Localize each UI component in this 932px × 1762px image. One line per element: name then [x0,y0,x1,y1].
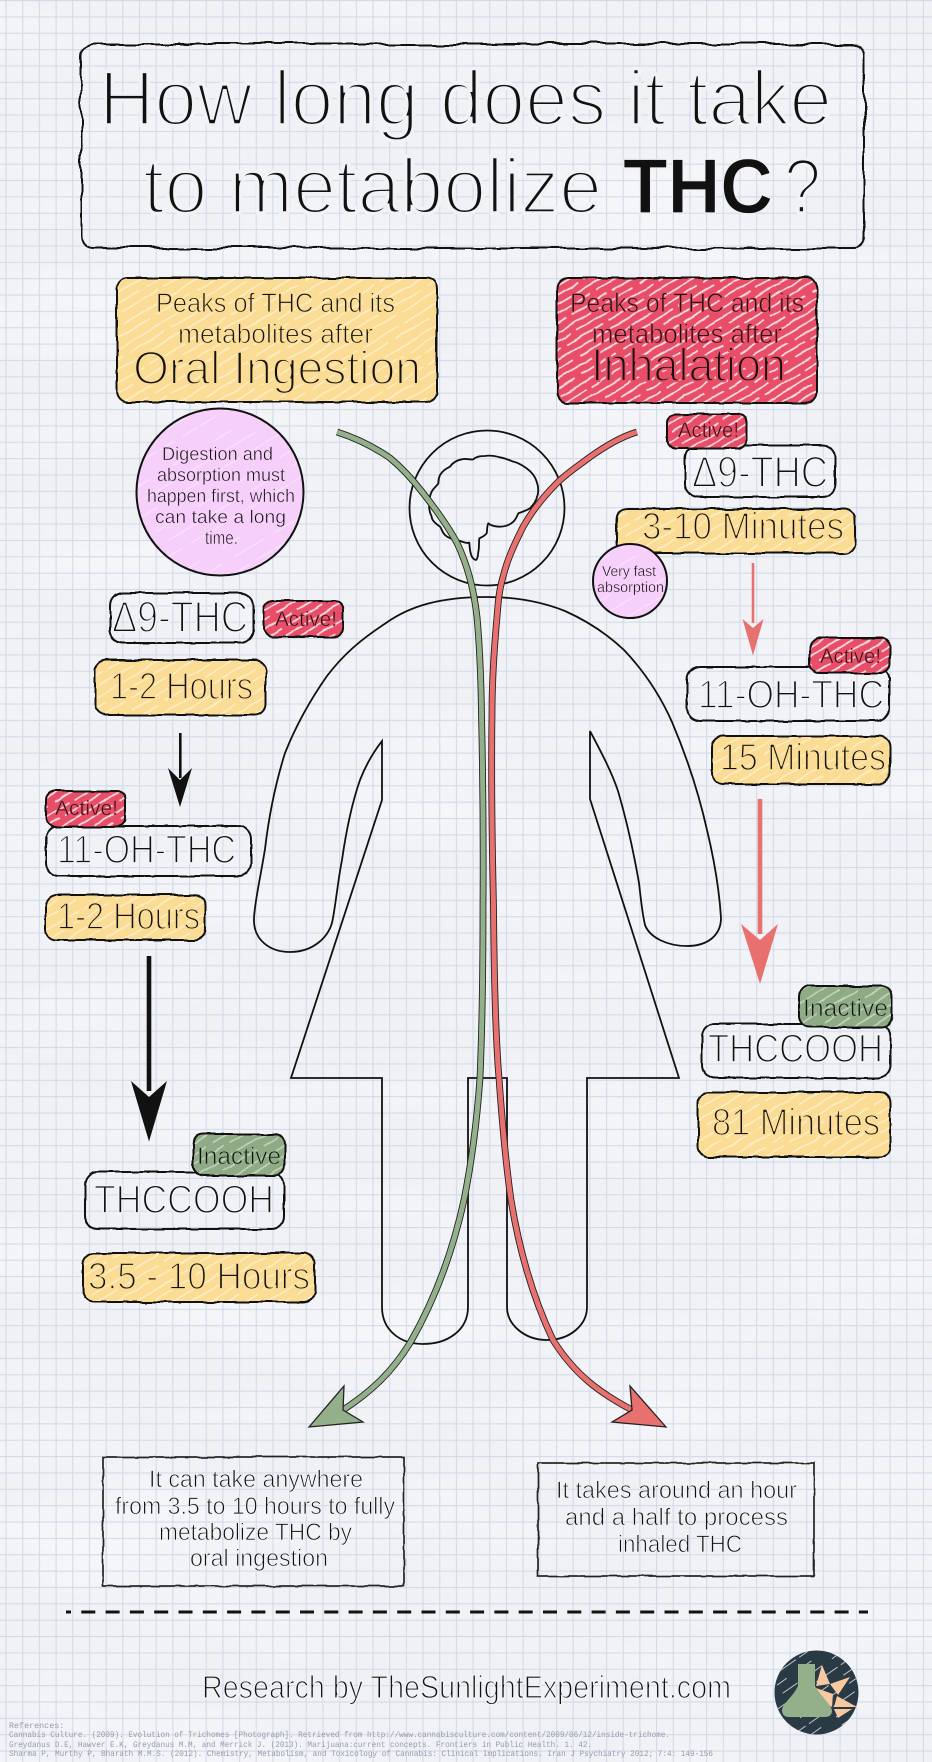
digestion text: time. [205,527,238,548]
callout: digestion circle [136,408,304,576]
title question mark: ? [784,142,821,230]
inhalation header line 2: metabolites after [592,319,782,349]
digestion text: Digestion and [162,443,273,464]
panel: inhaled 11-OH-THC: 11-OH-THC [698,673,884,717]
time: inhaled THCCOOH duration: 81 Minutes [712,1102,880,1144]
oral header box [117,278,437,402]
panel: oral ingestion header [117,278,437,402]
title line 2: to metabolize [143,142,602,230]
tag: inhaled THCCOOH inactive: Inactive [803,995,888,1022]
callout: very fast absorption: Very fast [602,564,656,580]
inhalation header line 3: Inhalation [591,338,786,391]
tag: inhaled 11-OH active [810,638,890,673]
panel: inhaled delta-9 THC: Δ9-THC [692,448,828,497]
pink circle [136,408,304,576]
tag: oral 11-OH active [46,791,125,827]
panel: oral conclusion: It can take anywhere [149,1466,363,1493]
time: oral THCCOOH duration: 3.5 - 10 Hours [88,1256,310,1298]
digestion text: absorption must [157,464,285,485]
panel: inhalation conclusion: inhaled THC [618,1531,742,1558]
digestion text: can take a long [155,506,286,527]
inhalation header line 1: Peaks of THC and its [570,288,804,318]
tag: oral delta-9 active: Active! [275,608,337,631]
tag: inhaled delta-9 active: Active! [678,419,739,442]
figure: human body outline [254,597,721,1344]
arrow: inhalation pathway (red) [492,432,666,1427]
time: inhaled 11-OH duration: 15 Minutes [720,737,886,779]
tag: inhaled 11-OH active: Active! [820,645,881,668]
arrow: oral step 1 [168,733,192,807]
arrow: oral pathway (green) [309,432,483,1427]
digestion text [147,443,295,548]
callout: very fast absorption: absorption [597,580,664,596]
panel: oral conclusion [103,1457,404,1586]
credit line: Research by TheSunlightExperiment.com [202,1669,731,1705]
panel: inhalation conclusion: and a half to process [565,1504,788,1531]
references: Greydanus D.E, Hawver E.K, Greydanus M.M, and Merrick J. (2013). Marijuana:current concepts. Frontiers in Public Health. 1. 42. [9,1740,592,1750]
callout: very fast absorption [593,544,667,618]
panel: oral delta-9 THC [110,593,253,643]
panel: inhalation conclusion: It takes around an hour [556,1477,797,1504]
panel: inhaled THCCOOH: THCCOOH [708,1027,883,1071]
tag: oral THCCOOH inactive: Inactive [197,1143,281,1170]
digestion text: happen first, which [147,485,295,506]
label text: Δ9-THC [112,593,248,642]
icon: flask and sun logo [774,1650,858,1734]
time: oral delta-9 duration: 1-2 Hours [110,666,253,708]
time: oral 11-OH duration: 1-2 Hours [57,896,200,938]
references: References: [9,1721,64,1731]
label box [110,593,253,643]
references [9,1721,713,1759]
tag: oral 11-OH active: Active! [55,797,118,820]
tag: oral delta-9 active [264,601,343,637]
tag: oral THCCOOH inactive [193,1134,285,1176]
panel: inhalation conclusion [538,1463,814,1576]
oral header line 3: Oral Ingestion [133,341,421,394]
panel: inhalation header [557,278,817,403]
oral header line 1: Peaks of THC and its [156,288,395,318]
time: oral delta-9 duration [95,660,266,715]
panel: oral conclusion: oral ingestion [190,1545,328,1572]
oral header line 2: metabolites after [178,319,373,349]
tag: inhaled delta-9 active [667,414,747,449]
references: Cannabis Culture. (2009). Evolution of Trichomes [Photograph]. Retrieved from http://www.cannabisculture.com/content/2009/06/12/inside-trichome. [9,1730,670,1740]
arrow: inhaled step 2 [741,799,778,984]
panel: oral conclusion: metabolize THC by [159,1519,352,1546]
arrow: inhaled step 1 [742,563,764,656]
title emphasis THC: THC [623,142,773,230]
tag: inhaled THCCOOH inactive [799,986,892,1027]
panel: oral THCCOOH: THCCOOH [94,1178,274,1222]
title line 1: How long does it take [99,54,832,142]
title frame [81,44,864,248]
time: inhaled delta-9 duration: 3-10 Minutes [642,506,844,548]
arrow: oral step 2 [131,956,167,1142]
panel: oral 11-OH-THC: 11-OH-THC [57,828,236,872]
figure: head circle [410,430,564,586]
title panel [81,44,864,248]
references: Sharma P, Murthy P, Bharath M.M.S. (2012). Chemistry, Metabolism, and Toxicology of Cannabis: Clinical Implications. Iran J Psychiatry 2012; 7:4: 149-156 [9,1749,713,1759]
icon: brain [429,456,538,560]
inhalation header box [557,278,817,403]
time: inhaled THCCOOH duration [698,1092,890,1157]
panel: oral conclusion: from 3.5 to 10 hours to fully [115,1493,395,1520]
